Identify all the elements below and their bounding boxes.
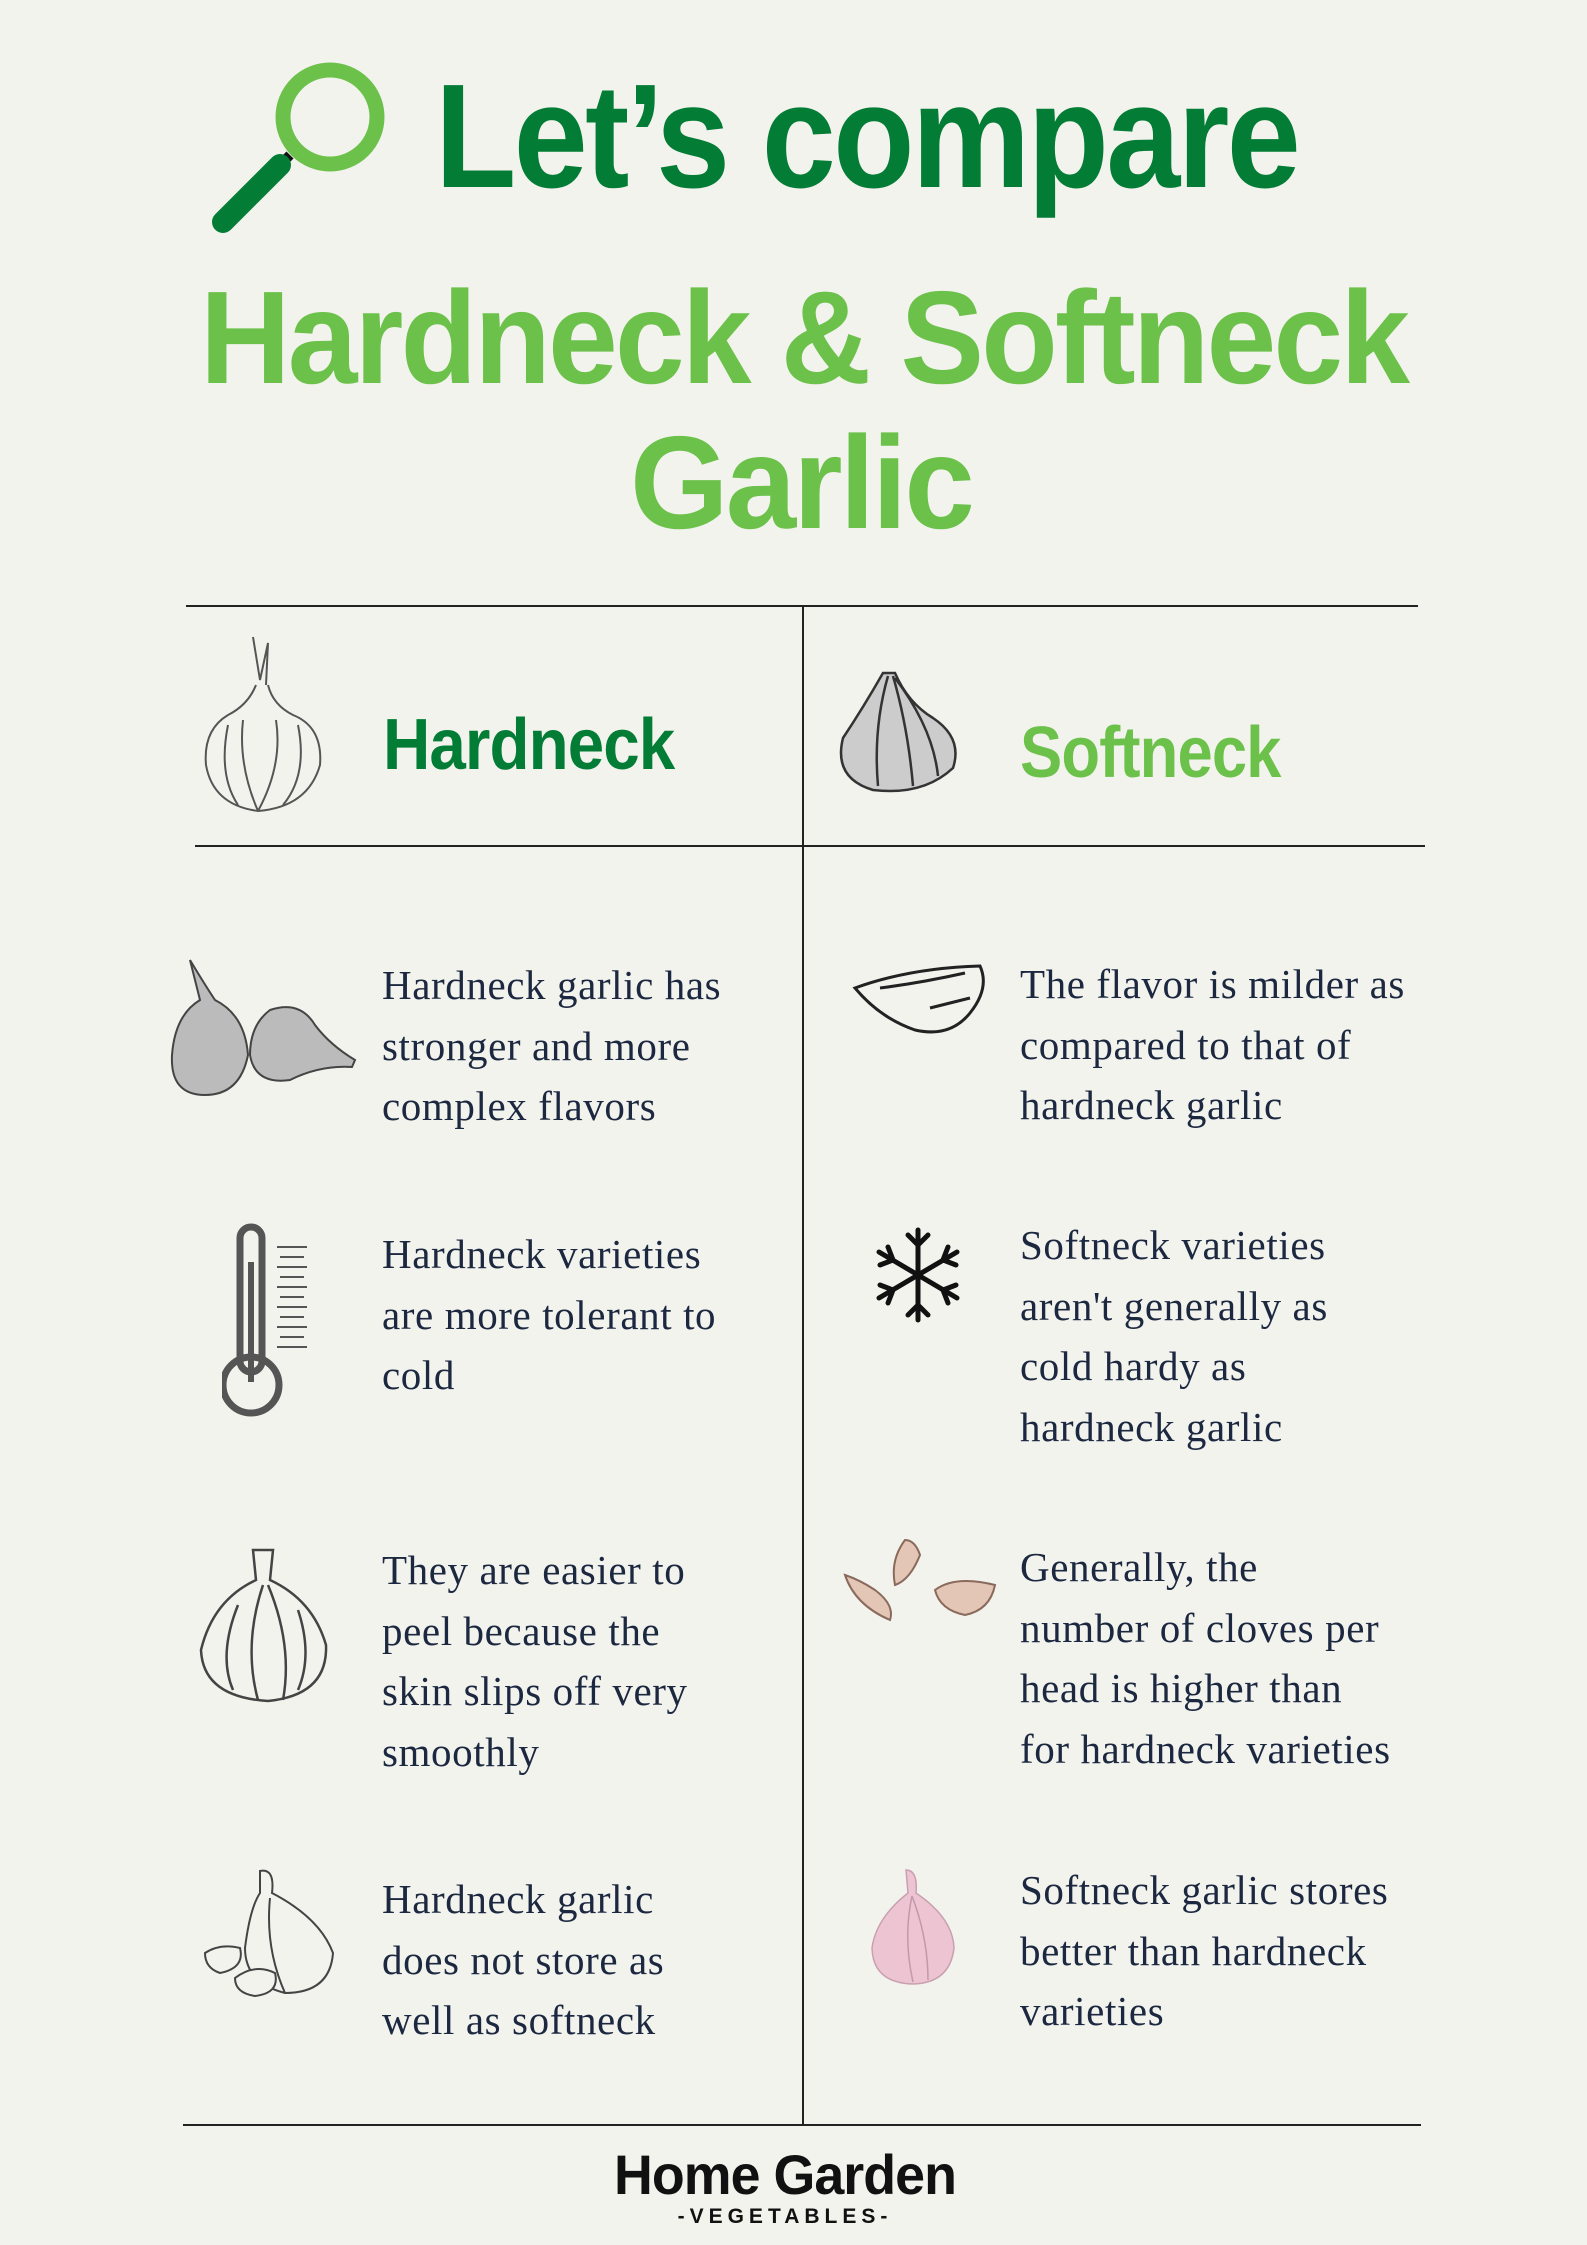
text: hardneck storage: Hardneck garlic xyxy=(382,1876,654,1922)
title: Hardneck & Softneck Garlic xyxy=(200,264,1410,556)
icon: cloves xyxy=(844,1539,996,1622)
icon: thermometer xyxy=(222,1224,307,1416)
text: hardneck flavor: stronger and more xyxy=(382,1022,690,1068)
text: cloves per head: for hardneck varieties xyxy=(1020,1726,1391,1772)
text: softneck cold: aren't generally as xyxy=(1020,1282,1328,1328)
text: softneck storage: varieties xyxy=(1020,1988,1164,2034)
text: softneck flavor: compared to that of xyxy=(1020,1022,1351,1068)
icon: garlic bulb xyxy=(200,1548,328,1702)
text: softneck storage: better than hardneck xyxy=(1020,1928,1367,1974)
text: easier to peel xyxy=(382,1547,688,1775)
text: softneck storage: Softneck garlic stores xyxy=(1020,1867,1388,1913)
text: hardneck storage: well as softneck xyxy=(382,1997,656,2043)
title: Hardneck & Softneck Garlic: Garlic xyxy=(630,409,972,556)
text: softneck flavor: hardneck garlic xyxy=(1020,1082,1283,1128)
text: softneck cold: hardneck garlic xyxy=(1020,1404,1283,1450)
text: easier to peel: skin slips off very xyxy=(382,1668,688,1714)
icon: magnifying glass xyxy=(212,62,384,233)
footer logo: -VEGETABLES- xyxy=(678,2205,892,2228)
icon: pink garlic xyxy=(871,1869,955,1985)
title: Hardneck & Softneck Garlic: Hardneck & Softneck xyxy=(200,264,1407,411)
text: hardneck flavor xyxy=(382,962,721,1129)
text: hardneck flavor: Hardneck garlic has xyxy=(382,962,721,1008)
icon: garlic with cloves xyxy=(204,1870,334,1997)
text: hardneck storage: does not store as xyxy=(382,1936,664,1982)
text: softneck cold xyxy=(1020,1222,1328,1450)
icon: hardneck garlic head xyxy=(204,636,322,812)
text: hardneck storage xyxy=(382,1876,664,2043)
icon: snowflake xyxy=(876,1228,960,1322)
footer logo: Home Garden xyxy=(614,2143,956,2206)
text: easier to peel: peel because the xyxy=(382,1608,660,1654)
text: softneck storage xyxy=(1020,1867,1388,2034)
title: Let's compare: Let’s compare xyxy=(435,54,1298,219)
heading: Hardneck: Hardneck xyxy=(383,705,674,785)
icon: softneck garlic xyxy=(840,672,957,792)
text: softneck cold: Softneck varieties xyxy=(1020,1222,1326,1268)
text: softneck flavor xyxy=(1020,961,1405,1128)
text: easier to peel: They are easier to xyxy=(382,1547,685,1593)
text: hardneck flavor: complex flavors xyxy=(382,1083,656,1129)
text: hardneck cold: Hardneck varieties xyxy=(382,1231,701,1277)
text: cloves per head: Generally, the xyxy=(1020,1544,1258,1590)
icon: garlic bulbs xyxy=(170,960,356,1096)
text: hardneck cold: cold xyxy=(382,1352,455,1398)
text: easier to peel: smoothly xyxy=(382,1728,539,1774)
text: cloves per head: head is higher than xyxy=(1020,1665,1342,1711)
icon: clove xyxy=(852,964,985,1034)
heading: Softneck: Softneck xyxy=(1020,713,1281,793)
text: cloves per head xyxy=(1020,1544,1391,1772)
text: hardneck cold: are more tolerant to xyxy=(382,1292,716,1338)
text: softneck flavor: The flavor is milder as xyxy=(1020,961,1405,1007)
text: cloves per head: number of cloves per xyxy=(1020,1604,1379,1650)
text: hardneck cold xyxy=(382,1231,716,1398)
text: softneck cold: cold hardy as xyxy=(1020,1343,1246,1389)
